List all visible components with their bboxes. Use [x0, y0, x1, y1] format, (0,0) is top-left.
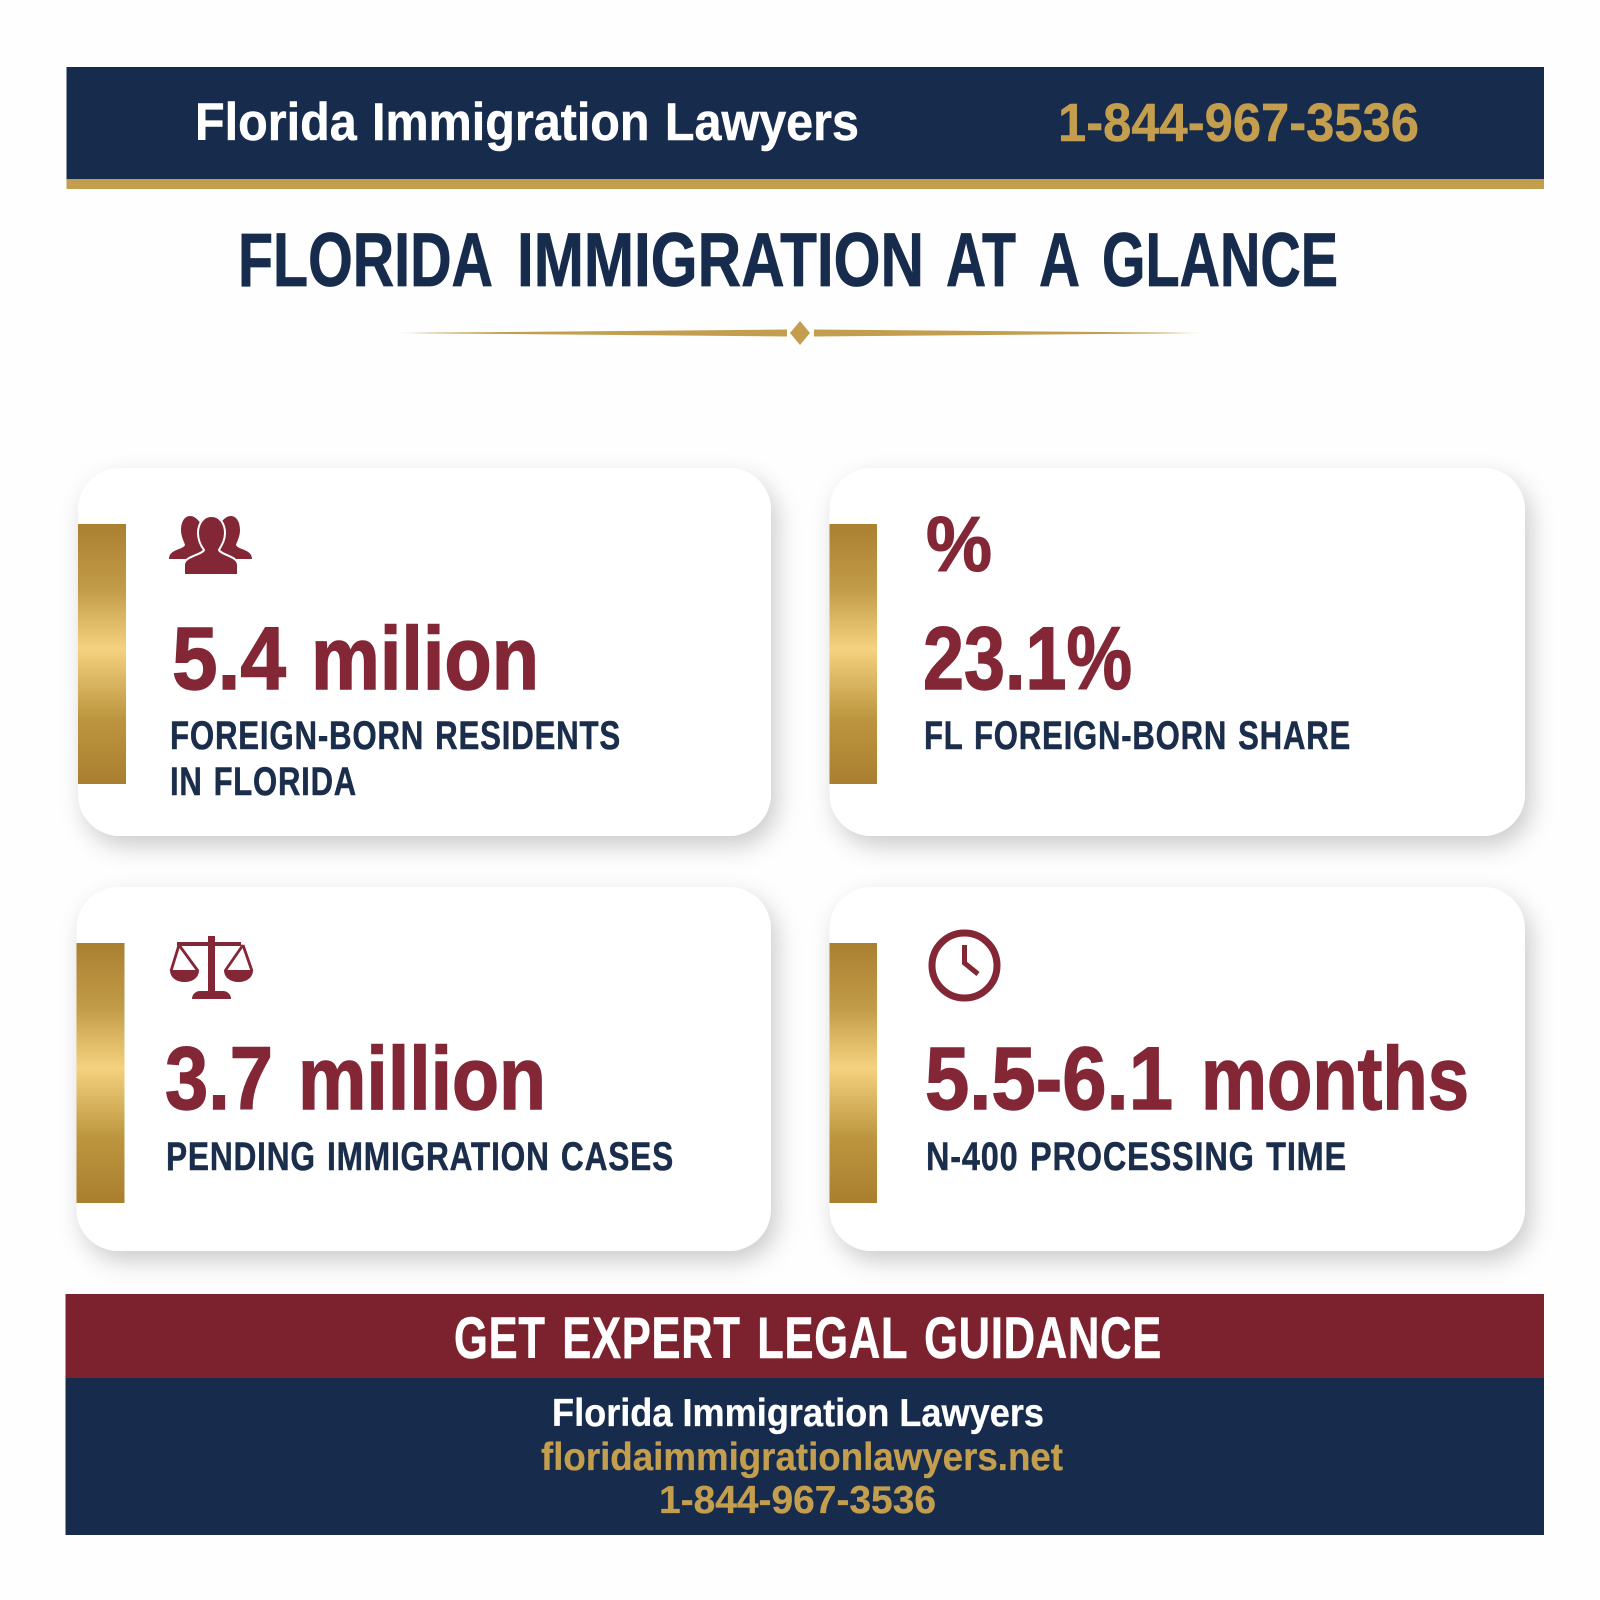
footer firm name: Florida Immigration Lawyers: [552, 1392, 1044, 1435]
main title: A: [1039, 218, 1080, 303]
stat label: FOREIGN-BORN RESIDENTS: [170, 714, 621, 758]
stat value: 23.1%: [923, 608, 1132, 708]
header gold rule: [66, 179, 1544, 189]
icon: percent sign: %: [926, 500, 992, 588]
header navy bar: [66, 67, 1544, 179]
icon: scales of justice: [170, 936, 253, 999]
stat value: 5.5-6.1: [925, 1028, 1173, 1128]
title divider with diamond: [390, 321, 1210, 345]
panel: N-400 processing time: [830, 887, 1525, 1251]
main title: AT: [946, 218, 1016, 303]
stat value: 3.7: [165, 1028, 273, 1128]
card background: [76, 887, 771, 1251]
stat value: milion: [311, 608, 539, 708]
icon: clock: [932, 933, 997, 998]
footer website: floridaimmigrationlawyers.net: [541, 1436, 1063, 1479]
main title: FLORIDA: [238, 218, 493, 303]
panel: foreign-born share: [830, 468, 1525, 836]
panel: pending immigration cases: [76, 887, 771, 1251]
stat label: PENDING IMMIGRATION CASES: [166, 1135, 674, 1179]
stat label: N-400 PROCESSING TIME: [926, 1135, 1347, 1179]
stat label second line: IN FLORIDA: [170, 760, 357, 804]
card background: [78, 468, 771, 836]
stat value: months: [1201, 1028, 1469, 1128]
gold accent bar: [830, 524, 877, 784]
icon: three people: [169, 516, 252, 575]
main title: IMMIGRATION: [517, 218, 924, 303]
footer red band: [66, 1294, 1544, 1378]
card background: [830, 887, 1525, 1251]
gold accent bar: [78, 524, 126, 784]
panel: foreign-born residents: [78, 468, 771, 836]
gold accent bar: [76, 943, 124, 1203]
footer navy band: [66, 1378, 1544, 1535]
stat value: 5.4: [172, 608, 286, 708]
header banner: [66, 67, 1544, 189]
stat value: [165, 1028, 546, 1128]
main title: [238, 218, 1338, 303]
stat label: FL FOREIGN-BORN SHARE: [924, 714, 1351, 758]
stat value: million: [298, 1028, 546, 1128]
firm name: Florida Immigration Lawyers: [195, 93, 859, 152]
stat value: [172, 608, 539, 708]
card background: [830, 468, 1525, 836]
call to action heading: GET EXPERT LEGAL GUIDANCE: [454, 1306, 1162, 1371]
footer call to action: [66, 1294, 1544, 1535]
stat value: [925, 1028, 1469, 1128]
main title: GLANCE: [1102, 218, 1338, 303]
footer phone number: 1-844-967-3536: [659, 1479, 936, 1522]
gold accent bar: [830, 943, 877, 1203]
phone number: 1-844-967-3536: [1058, 93, 1419, 153]
